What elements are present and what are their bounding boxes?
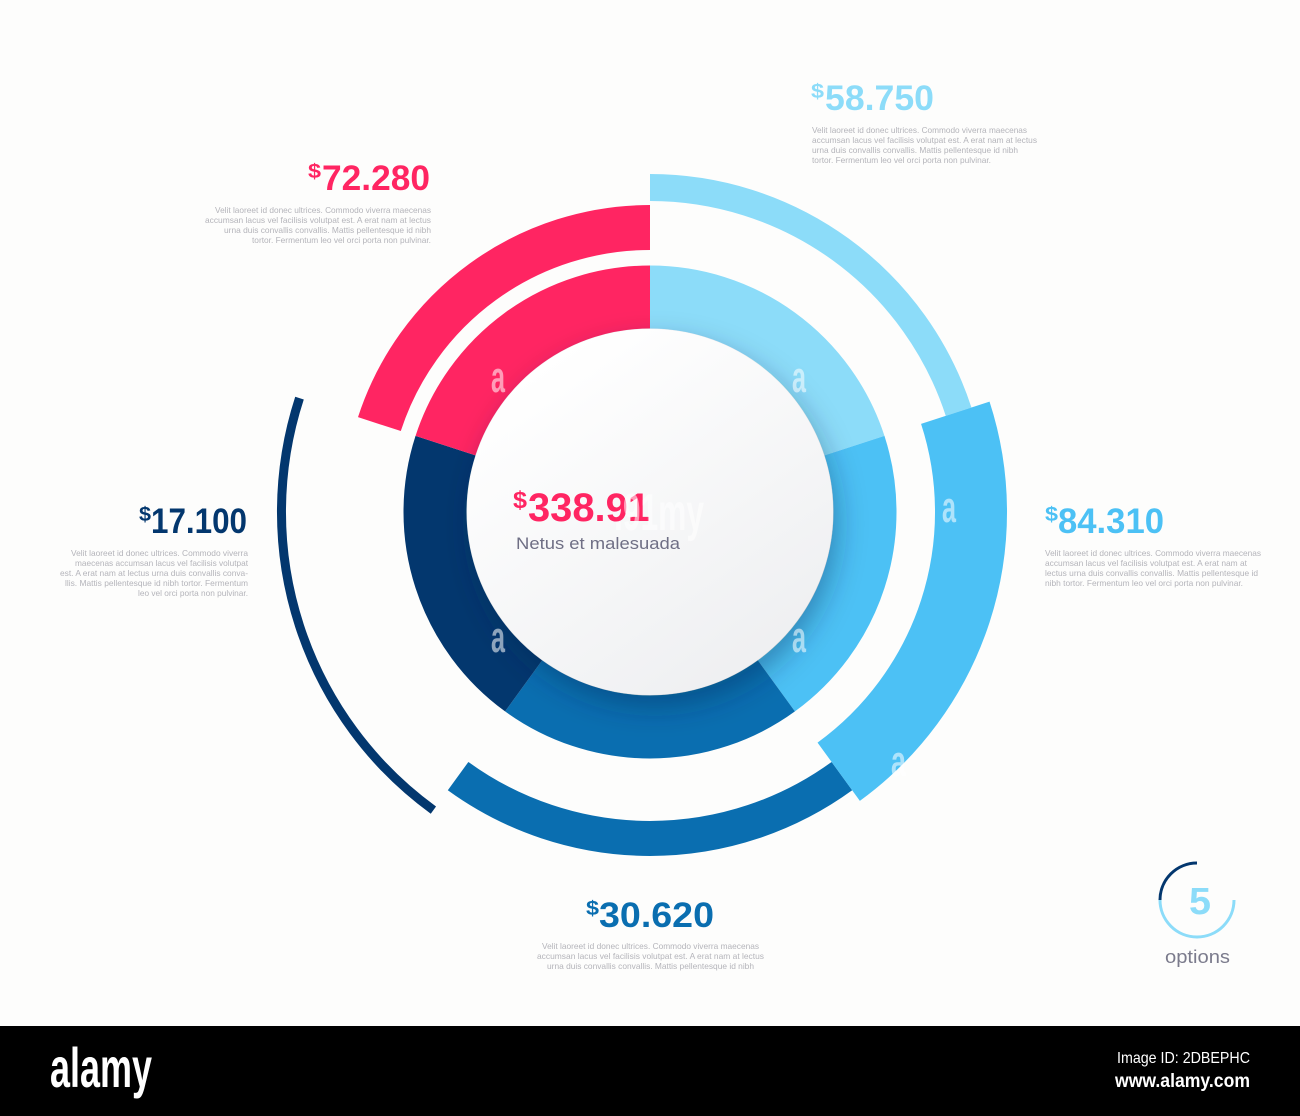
outer arc: navy 17.100: [281, 398, 433, 810]
footer bar: www.alamy.com: [1114, 1071, 1250, 1092]
label: 72.280: Velit laoreet id donec ultrices. Commodo viverra maecenas: [215, 206, 431, 215]
label: 72.280: 72.280: [322, 159, 430, 198]
outer arc: light blue 58.750: [650, 188, 959, 412]
watermark glyphs: a: [891, 737, 906, 786]
label: 30.620: urna duis convallis convallis. Mattis pellentesque id nibh: [547, 962, 754, 971]
label: 17.100: [60, 502, 249, 598]
watermark glyphs: a: [491, 613, 505, 662]
footer bar: alamy: [50, 1036, 152, 1099]
label: 17.100: est. A erat nam at lectus urna duis convallis conva-: [60, 569, 248, 578]
watermark glyphs: .91my: [614, 484, 704, 542]
center caption: Netus et malesuada: [516, 534, 681, 553]
label: 58.750: $: [811, 81, 824, 103]
label: 58.750: urna duis convallis convallis. Mattis pellentesque id nibh: [812, 146, 1018, 155]
center total value: 338.91: [528, 486, 650, 530]
outer arc: red 72.280: [379, 228, 650, 424]
watermark glyphs: a: [491, 353, 505, 402]
watermark glyphs: a: [792, 353, 806, 402]
label: 17.100: leo vel orci porta non pulvinar.: [138, 589, 248, 598]
options badge: options: [1165, 947, 1230, 967]
label: 30.620: [537, 896, 764, 971]
label: 58.750: Velit laoreet id donec ultrices. Commodo viverra maecenas: [812, 126, 1027, 135]
center total value: $: [513, 487, 528, 514]
inner ring of five segments: [435, 297, 865, 727]
outer arc: sky blue 84.310: [839, 413, 971, 772]
label: 58.750: [811, 79, 1037, 165]
label: 84.310: nibh tortor. Fermentum leo vel orci porta non pulvinar.: [1045, 579, 1243, 588]
options badge: 5: [1189, 881, 1211, 923]
label: 58.750: 58.750: [825, 79, 934, 118]
footer bar: [0, 1026, 1300, 1116]
label: 84.310: accumsan lacus vel facilisis volutpat est. A erat nam at: [1045, 559, 1248, 568]
label: 58.750: tortor. Fermentum leo vel orci porta non pulvinar.: [812, 156, 991, 165]
label: 84.310: 84.310: [1058, 502, 1164, 541]
label: 30.620: Velit laoreet id donec ultrices. Commodo viverra maecenas: [542, 942, 759, 951]
label: 72.280: $: [308, 161, 321, 183]
watermark glyphs: [491, 353, 956, 786]
label: 84.310: Velit laoreet id donec ultrices. Commodo viverra maecenas: [1045, 549, 1261, 558]
label: 17.100: Velit laoreet id donec ultrices. Commodo viverra: [71, 549, 248, 558]
outer arc: blue 30.620: [458, 776, 842, 838]
label: 30.620: 30.620: [599, 896, 714, 935]
label: 84.310: lectus urna duis convallis convallis. Mattis pellentesque id: [1045, 569, 1258, 578]
label: 72.280: [205, 159, 431, 245]
watermark glyphs: a: [792, 613, 806, 662]
footer bar: Image ID: 2DBEPHC: [1117, 1050, 1250, 1067]
watermark glyphs: a: [942, 483, 956, 532]
label: 84.310: $: [1045, 504, 1058, 526]
label: 72.280: tortor. Fermentum leo vel orci porta non pulvinar.: [252, 236, 431, 245]
options badge: [1160, 863, 1234, 967]
label: 58.750: accumsan lacus vel facilisis volutpat est. A erat nam at lectus: [812, 136, 1037, 145]
label: 17.100: llis. Mattis pellentesque id nibh tortor. Fermentum: [65, 579, 248, 588]
label: 17.100: $: [139, 504, 151, 526]
label: 72.280: urna duis convallis convallis. Mattis pellentesque id nibh: [224, 226, 431, 235]
label: 30.620: $: [586, 898, 599, 920]
center disc: [467, 329, 833, 695]
label: 17.100: 17.100: [151, 502, 247, 541]
label: 17.100: maecenas accumsan lacus vel facilisis volutpat: [75, 559, 249, 568]
label: 72.280: accumsan lacus vel facilisis volutpat est. A erat nam at lectus: [205, 216, 431, 225]
label: 84.310: [1045, 502, 1261, 588]
label: 30.620: accumsan lacus vel facilisis volutpat est. A erat nam at lectus: [537, 952, 764, 961]
